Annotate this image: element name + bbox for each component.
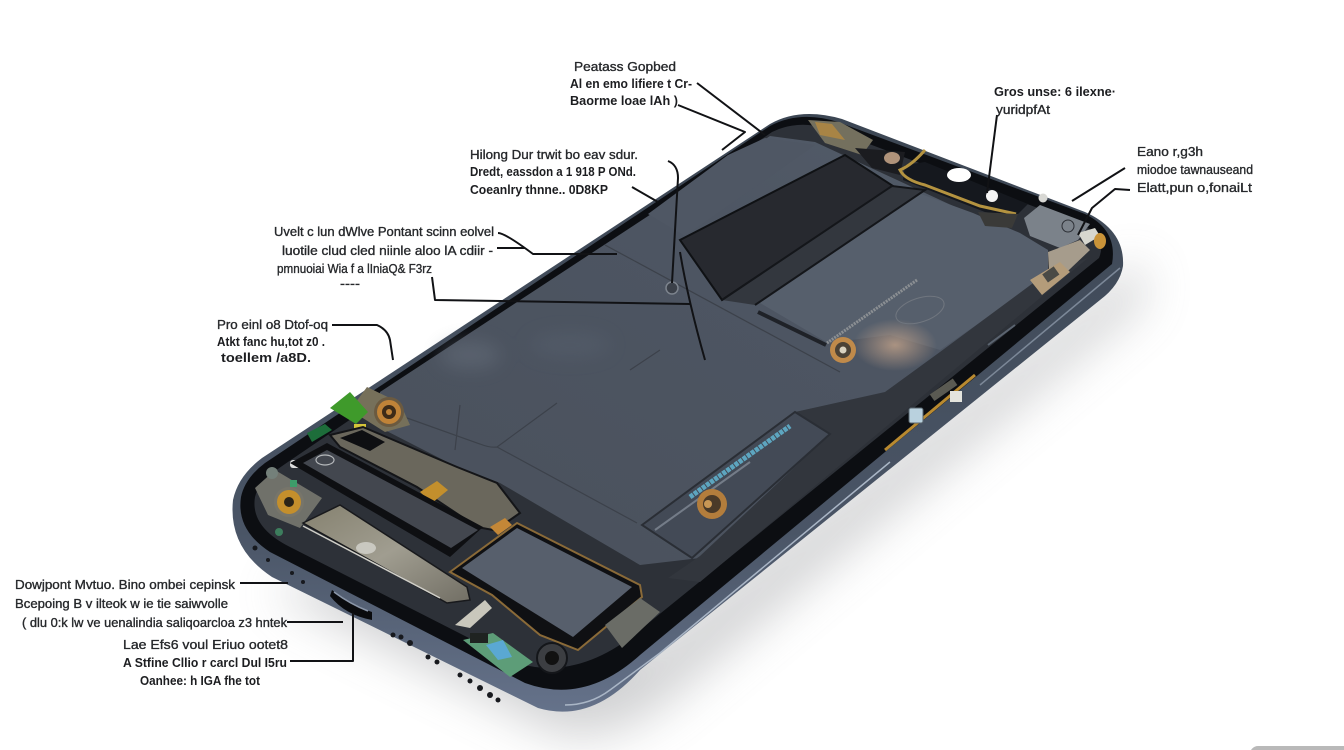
bottom camera [537,643,567,673]
interior base [254,125,1101,668]
side components right [885,325,1015,450]
background corner tab [1250,746,1344,750]
gold ring lower [697,489,727,519]
label: bottom left lower: Lae Efs6 voul Eriuo ootet8 [123,637,288,652]
small bottom parts [605,598,660,648]
label: left [217,317,328,365]
label: left: toellem /a8D. [221,350,311,365]
phone drop shadow [270,260,1145,737]
label: top right: yuridpfAt [996,102,1050,117]
label: bottom left lower [123,637,288,688]
black screen frame [240,117,1113,690]
phone body [232,114,1123,712]
label: upper middle: Dredt, eassdon a 1 918 P ONd. [470,164,636,179]
screw [666,282,678,294]
label: middle left: Uvelt c lun dWlve Pontant scinn eolvel [274,224,494,239]
label: upper middle: Coeanlry thnne.. 0D8KP [470,182,608,197]
label: bottom left upper: ( dlu 0:k lw ve uenalindia saliqoarcloa z3 hntek [22,615,287,630]
gold flex [900,150,1016,214]
gold coil upper [374,397,404,427]
label: bottom left lower: A Stfine Cllio r carcl Dul I5ru [123,655,287,670]
camera module [903,162,1028,216]
label: bottom left lower: Oanhee: h IGA fhe tot [140,673,261,688]
dark seam [722,186,925,305]
main grey plate [375,136,1048,565]
leader lines [240,83,1130,661]
speaker dots [252,546,500,702]
label: bottom left upper: Dowjpont Mvtuo. Bino ombei cepinsk [15,577,236,592]
scuff marks [440,333,610,369]
label: upper middle: Hilong Dur trwit bo eav sdur. [470,147,638,162]
oval outline [893,291,947,329]
label: left: Pro einl o8 Dtof-oq [217,317,328,332]
label: bottom left upper [15,577,287,630]
right channel [668,258,1088,582]
phone illustration [232,114,1123,712]
label: top right [994,84,1116,117]
label: top centre [570,59,692,108]
lower panel with blue strip [642,412,830,558]
label: left: Atkt fanc hu,tot z0 . [217,334,325,349]
label: top centre: Peatass Gopbed [574,59,676,74]
edge highlight [565,462,890,705]
square module [450,523,642,650]
gold connector ring centre [830,337,856,363]
label: far right [1137,144,1253,195]
warm glow [853,319,937,371]
label: upper middle [470,147,638,197]
label: bottom left upper: Bcepoing B v ilteok w ie tie saiwvolle [15,596,228,611]
top plate [648,138,815,236]
label: middle left: pmnuoiai Wia f a lIniaQ& F3rz [277,261,432,276]
green flex at left [307,392,368,442]
label: far right: Eano r,g3h [1137,144,1203,159]
pcb [463,633,533,677]
charging port [330,590,372,620]
textured strip [827,280,917,343]
connector cut-out [340,430,385,451]
small circuitry [255,460,322,536]
upper connector board [330,427,520,530]
panel edge lines [393,245,840,523]
coil circuit board [350,387,410,432]
label: far right: Elatt,pun o,fonaiLt [1137,180,1252,195]
label: top right: Gros unse: 6 ilexne· [994,84,1116,99]
gold connector small [420,481,448,503]
dark battery panel [680,155,893,300]
label: top centre: Al en emo lifiere t Cr- [570,76,692,91]
metal shield [303,505,470,603]
label: top centre: Baorme loae lAh ) [570,93,678,108]
label: middle left: luotile clud cled niinle aloo lA cdiir - [282,243,493,258]
right panel [760,190,1048,350]
dark long module [290,443,483,557]
panel lower stripe [758,312,826,345]
grey shield top right [1024,205,1090,248]
top components [808,120,1106,295]
label: far right: miodoe tawnauseand [1137,162,1253,177]
gold coil lower [274,487,304,517]
label: middle left [274,224,494,291]
label: middle left: ---- [340,276,360,291]
